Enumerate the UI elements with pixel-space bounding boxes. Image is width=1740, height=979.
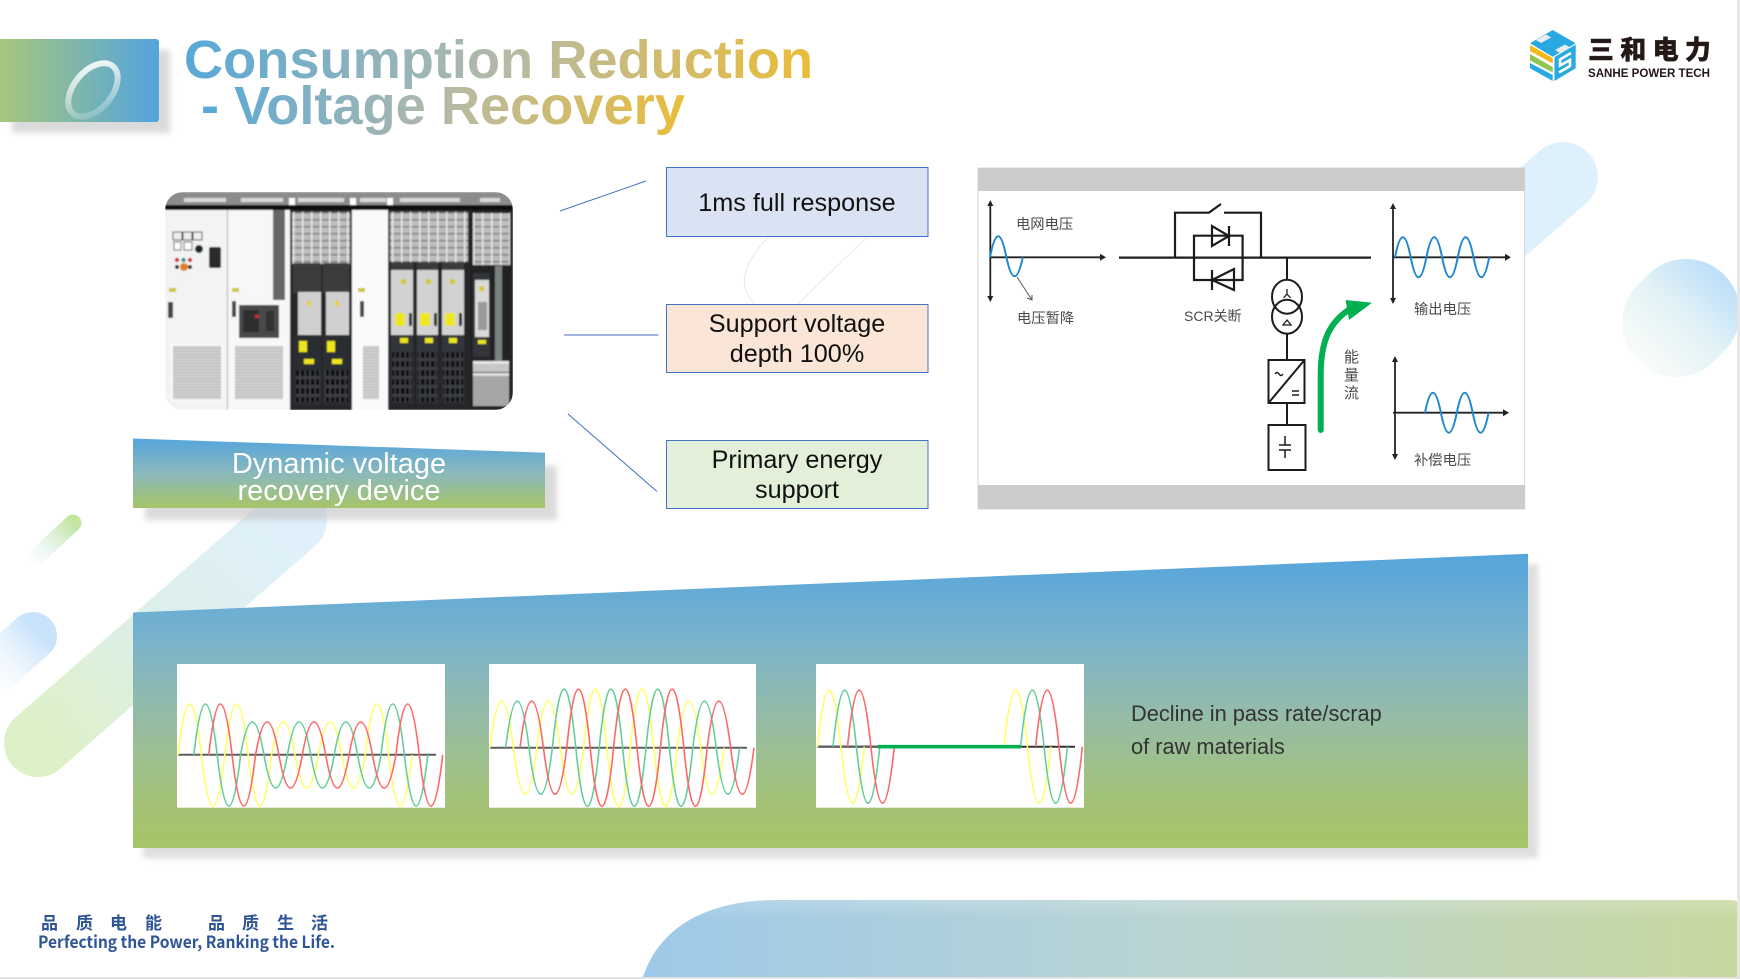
footer slogan: Perfecting the Power, Ranking the Life.	[38, 929, 335, 953]
caption ribbon: dynamic voltage recovery device: recovery device	[237, 475, 441, 507]
footer slogan	[38, 909, 335, 953]
cabinet 5 with three modules	[388, 210, 470, 410]
feature box: support voltage depth: depth 100%	[730, 340, 864, 368]
faint decorative outline between boxes	[744, 236, 868, 304]
feature box: primary energy support	[666, 440, 928, 508]
transformer, converter, capacitor	[1268, 258, 1306, 470]
background decoration: bottom right wave shape	[643, 900, 1737, 977]
text: decline in pass rate: of raw materials	[1131, 734, 1285, 759]
background decoration: top right pill	[1470, 177, 1563, 258]
background decoration: right blob	[1676, 313, 1686, 323]
connector line to box 2	[564, 334, 658, 336]
title: Consumption Reduction	[184, 30, 813, 90]
logo: Sanhe Power Tech: 三和电力	[1588, 30, 1717, 67]
circuit diagram panel: 电网电压	[1016, 216, 1073, 233]
connector line to box 1	[560, 181, 646, 211]
header block with ring icon	[0, 39, 170, 133]
circuit diagram panel: 补偿电压	[1414, 452, 1471, 469]
connector line to box 3	[568, 414, 657, 492]
cabinet 6	[470, 210, 513, 410]
title: - Voltage Recovery	[201, 76, 685, 136]
background decoration: medium blue pill	[0, 636, 33, 670]
feature box: support voltage depth: Support voltage	[709, 310, 885, 338]
circuit diagram panel	[978, 168, 1525, 509]
feature box: 1ms full response: 1ms full response	[698, 189, 896, 217]
cabinet 1 and controls	[165, 210, 227, 410]
logo: Sanhe Power Tech	[1530, 30, 1717, 81]
output voltage axes and wave	[1390, 203, 1511, 304]
bottom panel	[133, 554, 1538, 858]
cabinet 4	[352, 210, 388, 410]
cabinet 2 with breaker	[291, 208, 292, 209]
arrow: energy flow	[1321, 300, 1372, 430]
cabinet roof	[165, 192, 513, 205]
feature box: primary energy support: Primary energy	[712, 446, 883, 474]
cabinet 3 with two modules	[290, 210, 352, 410]
feature box: 1ms full response	[666, 168, 928, 236]
SCR switch and main line	[1119, 204, 1371, 290]
footer slogan: 品质电能品质生活	[41, 909, 328, 934]
grid voltage axes and wave	[987, 200, 1106, 302]
text: decline in pass rate: Decline in pass rate/scrap	[1131, 701, 1382, 726]
caption ribbon: dynamic voltage recovery device	[133, 438, 557, 520]
feature box: primary energy support: support	[755, 476, 839, 504]
background decoration: small green pill	[33, 523, 73, 560]
logo: Sanhe Power Tech: SANHE POWER TECH	[1588, 66, 1710, 80]
chart: voltage interruption waveform	[816, 664, 1084, 808]
feature box: support voltage depth	[666, 304, 928, 372]
circuit diagram panel: 输出电压	[1414, 301, 1471, 318]
caption ribbon: dynamic voltage recovery device: Dynamic voltage	[232, 448, 446, 480]
circuit diagram panel: 电压暂降	[1017, 310, 1074, 327]
text: decline in pass rate	[1131, 701, 1382, 759]
device photo: power cabinet	[165, 192, 513, 410]
circuit diagram panel: SCR关断	[1184, 308, 1242, 324]
icon: ring	[59, 54, 127, 126]
compensation voltage axes and wave	[1392, 356, 1509, 460]
chart: voltage sag waveform	[177, 664, 445, 808]
icon: cube	[1530, 30, 1576, 81]
background decoration: large diagonal pill	[38, 520, 293, 743]
title	[184, 30, 813, 136]
circuit diagram panel: 能量流	[1344, 349, 1359, 402]
chart: voltage swell waveform	[489, 664, 756, 808]
